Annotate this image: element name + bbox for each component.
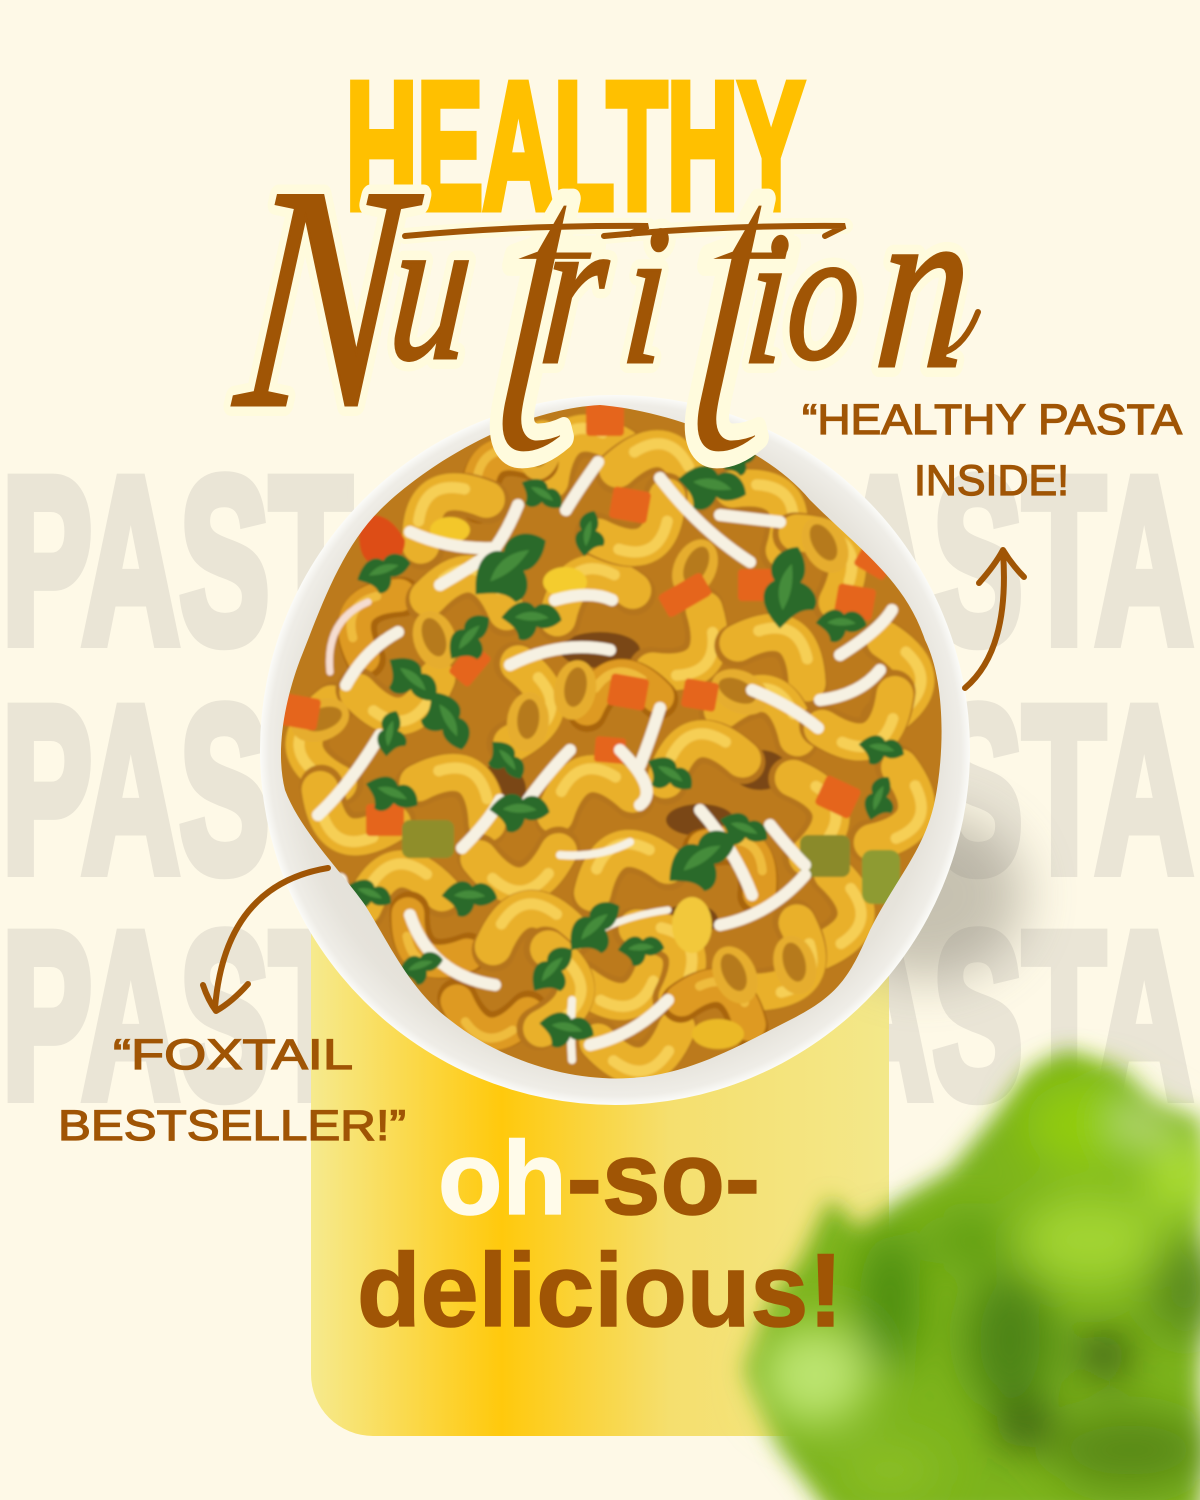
arrow: to foxtail callout [203,868,328,1011]
title: Nutrition outline: N [224,121,431,475]
title: Nutrition: i [738,194,796,404]
callout: healthy pasta inside [802,396,1182,505]
title: Nutrition outline: r [533,171,618,409]
callout: foxtail bestseller: BESTSELLER!” [58,1102,406,1150]
title: Nutrition: o [780,190,870,400]
watermark row 3 left: PAST [2,884,352,1148]
callout: healthy pasta inside: INSIDE! [914,457,1069,505]
herb leaves [341,445,907,1058]
macaroni pieces [285,414,933,1078]
dark crevices [487,631,783,930]
watermark row 2 left: PAST [2,658,352,922]
title: Nutrition outline: t [471,53,620,551]
title: Nutrition: t [666,53,815,551]
title: Nutrition outline: i [616,185,677,406]
lettuce silhouette [745,1050,1200,1500]
title: Nutrition outline: o [780,190,870,400]
carrot and pepper pieces [279,404,900,1049]
watermark row 1 left: PAST [2,429,352,693]
title: crossbars outline [405,226,845,236]
title: Nutrition: N [224,121,431,475]
yellow panel [311,930,889,1436]
cheese strands [318,462,892,1060]
food [280,405,942,1078]
bowl shadow [825,810,1025,980]
title: crossbars and n tail [405,226,978,352]
callout: foxtail bestseller [58,1031,406,1150]
title: Nutrition: r [533,171,618,409]
food base [280,405,942,1078]
title: Nutrition outline: u [382,172,481,404]
arrow: to healthy pasta callout [965,550,1024,688]
slogan line 1: oh-so- [438,1121,760,1237]
title: Nutrition: i [616,185,677,406]
pasta bowl [260,390,970,1105]
background watermark: PASTA rows [2,429,1193,1148]
title: HEALTHY: HEALTHY [346,46,804,247]
blurred lettuce foreground [745,1050,1200,1500]
title: Nutrition outline: t [666,53,815,551]
slogan: oh-so-delicious [357,1121,843,1349]
title: Nutrition: n [868,153,982,418]
title: Nutrition outline: i [738,194,796,404]
slogan line 2: delicious! [357,1233,843,1349]
title: Nutrition: t [471,53,620,551]
title: Nutrition outline: n [868,153,982,418]
callout: healthy pasta inside: “HEALTHY PASTA [802,396,1182,444]
title: Nutrition: u [382,172,481,404]
lettuce shading [760,1080,1200,1496]
bowl body [260,395,970,1105]
callout: foxtail bestseller: “FOXTAIL [113,1031,353,1079]
